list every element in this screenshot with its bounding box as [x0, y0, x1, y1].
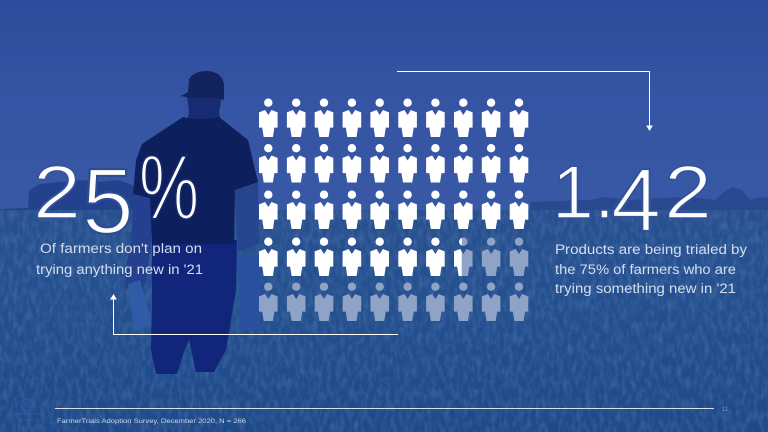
caption: 1.42 products: [555, 242, 747, 296]
stat: 1.42: 2: [664, 150, 712, 234]
farmer silhouette: [125, 71, 262, 374]
stat: 1.42: .: [594, 150, 615, 234]
pictogram: 10 by 5 people, 75 percent white: [259, 98, 528, 321]
stat: 25%: [33, 137, 199, 253]
row 2: [259, 144, 528, 182]
stat: 25%: 5: [82, 149, 134, 253]
caption: 25 percent of farmers: Of farmers don't plan on: [40, 241, 202, 256]
faint logo: [12, 399, 40, 420]
caption: 1.42 products: the 75% of farmers who are: [555, 262, 736, 277]
left arm: [125, 194, 152, 294]
held paper left: [128, 280, 152, 331]
row 4: [259, 238, 528, 276]
sky: [0, 0, 768, 212]
tree line left: [0, 180, 135, 212]
held board right: [237, 254, 262, 330]
caption: 25 percent of farmers: [36, 241, 203, 277]
page number: 11: [722, 407, 729, 413]
stat: 25%: 2: [33, 150, 81, 234]
footer source note: FarmerTrials Adoption Survey, December 2020, N = 266: [57, 418, 246, 425]
cap: [181, 71, 224, 100]
shirt: [133, 117, 258, 244]
head and neck: [187, 96, 222, 122]
footer rule: [55, 408, 714, 409]
arrow: bottom left pointing up: [111, 295, 398, 334]
field: [0, 210, 768, 432]
tree line right: [530, 187, 768, 212]
arrow: top right pointing down: [397, 72, 652, 130]
caption: 1.42 products: Products are being trialed by: [555, 242, 747, 257]
right arm: [234, 182, 259, 252]
row 5: [259, 282, 528, 321]
stat: 1.42: [552, 150, 712, 251]
row 1: [259, 98, 528, 137]
stat: 25%: %: [139, 137, 199, 239]
caption: 1.42 products: trying something new in '21: [555, 281, 736, 296]
row 3: [259, 190, 528, 229]
grass texture: [0, 210, 768, 432]
jeans: [151, 240, 237, 374]
caption: 25 percent of farmers: trying anything new in '21: [36, 262, 203, 277]
stat: 1.42: 1: [552, 150, 594, 234]
stat: 1.42: 4: [611, 151, 661, 251]
